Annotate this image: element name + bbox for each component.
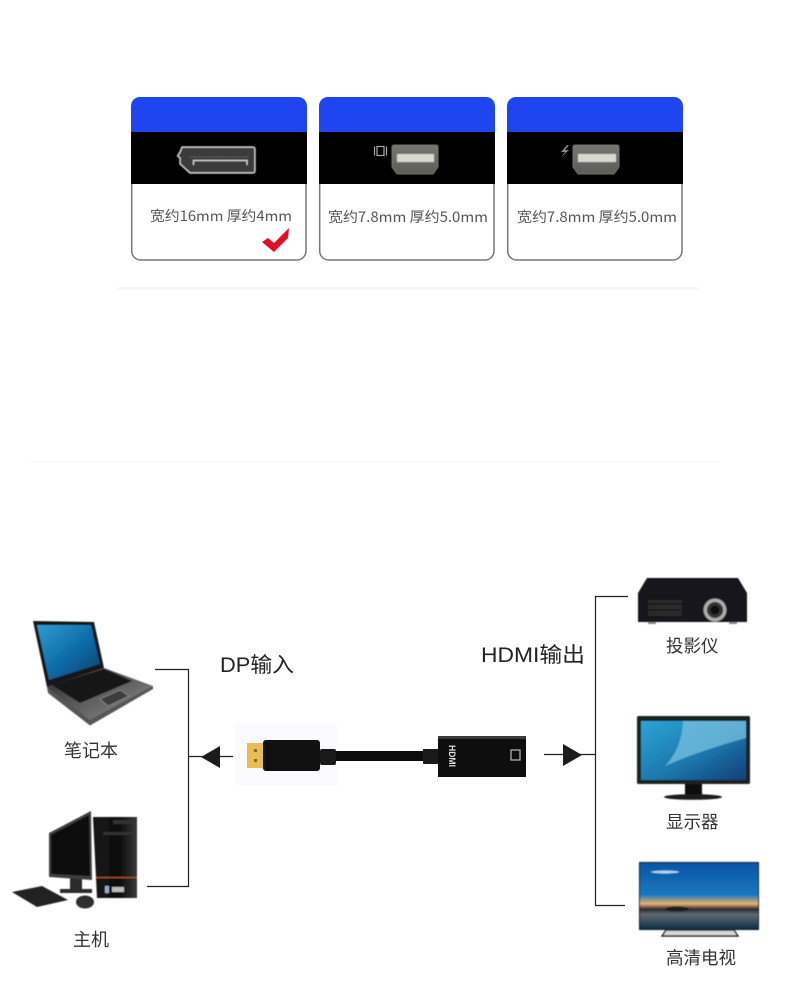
icon: HD television [639,862,759,936]
connector: right bracket [544,596,628,906]
icon: Mini DP socket [392,145,438,174]
panel: Mini DisplayPort connector card [319,97,495,260]
text: laptop label: 笔记本 [64,737,118,763]
image: DP to HDMI adapter cable [235,723,526,785]
icon: desktop computer [12,811,137,908]
text: Mini DP dimensions: 宽约7.8mm 厚约5.0mm [328,207,488,227]
icon: red check mark [262,228,289,252]
icon: HDMI port symbol [511,750,520,760]
arrow: to left devices [201,746,220,768]
text: DisplayPort dimensions: 宽约16mm 厚约4mm [150,206,292,226]
heading: HDMI output: HDMI输出 [481,644,585,667]
icon: Thunderbolt socket [573,145,619,174]
text: television label: 高清电视 [666,945,736,970]
text: desktop label: 主机 [73,926,109,952]
arrow: to right devices [563,744,582,766]
icon: projector [638,578,747,624]
panel: DisplayPort connector card [131,97,307,260]
text: projector label: 投影仪 [666,633,718,658]
icon: lightning bolt [561,145,569,157]
icon: DisplayPort socket [178,147,255,173]
text: Thunderbolt dimensions: 宽约7.8mm 厚约5.0mm [517,207,677,227]
panel: Thunderbolt connector card [507,97,683,260]
text: HDMI product marking: HDMI [447,745,457,767]
heading: DP input: DP输入 [220,654,294,677]
icon: Mini DP symbol [374,146,386,156]
icon: monitor [637,716,750,800]
text: monitor label: 显示器 [666,809,718,834]
connector: left bracket [147,670,233,886]
icon: laptop [33,621,153,726]
